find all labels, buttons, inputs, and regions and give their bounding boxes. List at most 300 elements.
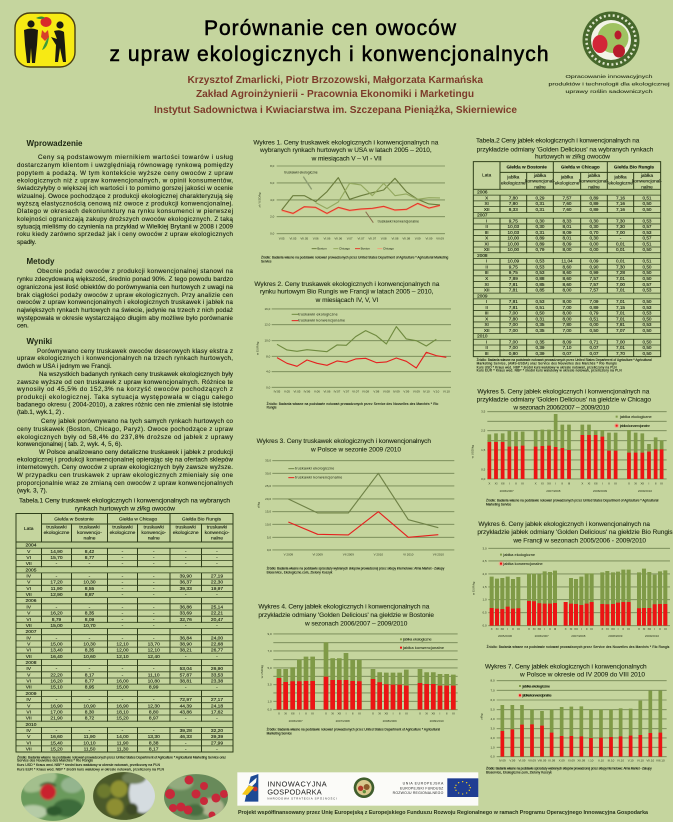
table 1 data rows: 8,17 — [149, 746, 159, 752]
table 2 data rows: 7,57 — [589, 282, 599, 287]
chart 6 plot: 1,5 — [483, 585, 487, 589]
table 2 data rows: XI — [484, 322, 489, 327]
table 1 data rows: 11,50 — [84, 746, 96, 752]
chart 1 title: wybranych rynkach hurtowych w USA w latach 2005 – 2010, — [259, 147, 432, 154]
chart 4 plot: 9,0 — [268, 632, 272, 636]
table 2 title — [476, 138, 654, 160]
table 1 source note — [17, 754, 226, 772]
chart 3 plot: 0,0 — [267, 548, 271, 552]
table 2 data rows: 8,00 — [562, 299, 572, 304]
table 2 data rows: 10,00 — [508, 247, 520, 252]
logo: yellow Adam and Eve emblem — [15, 13, 75, 67]
text block: results: W Polsce analizowano ceny detaliczne truskawek i jabłek z produkcji — [39, 449, 233, 456]
chart 6 plot: XI — [606, 627, 609, 631]
chart 6 plot: 3,0 — [483, 546, 487, 550]
chart 3 legend: truskawki konwencjonalne — [295, 476, 342, 480]
chart 5 plot — [470, 410, 667, 493]
chart 5 plot: III — [521, 481, 524, 485]
table 2 data rows: 0,50 — [642, 247, 652, 252]
chart 5 title: przykładzie odmiany 'Golden Delicious' na giełdzie w Chicago — [477, 396, 651, 403]
chart 2 title: Wykres 2. Ceny truskawek ekologicznych i konwencjonalnych na — [254, 281, 440, 288]
table 1 title: rynkach hurtowych w zł/kg owoców — [75, 506, 175, 512]
chart 6 plot: w EUR/kg — [472, 581, 476, 595]
chart 7 title: w Polsce w okresie od IV 2009 do VIII 2010 — [519, 671, 645, 678]
chart 1 source: Service — [261, 260, 272, 264]
table 1 data rows: - — [153, 587, 155, 592]
table 2 data rows: 0,80 — [509, 351, 518, 356]
chart 7 plot: 5,0 — [491, 708, 495, 712]
chart 4 plot: I — [299, 712, 300, 716]
table 1 data rows: V — [27, 642, 31, 648]
table 2 data rows: 7,01 — [616, 311, 625, 316]
panel: introduction text — [16, 139, 234, 246]
chart 3 source: Źródło: Badania własne na podstawie sprzedaży wybranych sklepów prowadzonej przez sklepy internetowe: Alma Market - Zakupy — [267, 566, 445, 571]
table 1 data rows: VI — [26, 586, 31, 592]
table 2 data rows: 7,30 — [616, 224, 625, 229]
table 2 data rows: 7,60 — [562, 207, 572, 212]
chart 6 source: Źródło: Badania własne na podstawie notowań prowadzonych przez Service des Nouvelles des Marchés * Rio Rungis — [487, 644, 670, 649]
chart 5 plot: II — [655, 481, 657, 485]
table 1 data rows: - — [153, 556, 155, 561]
table 2 source note — [477, 357, 652, 373]
chart 1 plot: V.07 — [347, 237, 353, 241]
table 2 header: jabłka — [587, 173, 600, 178]
table 2 source note: Kurs USD * Kraus wed. NBP * średni kurs walutowy w okresie notowań, przeliczony na PLN — [477, 365, 617, 369]
table 1 data rows: 11,90 — [117, 740, 129, 746]
table 1 data rows: 10,10 — [83, 740, 96, 746]
table 2 data rows: 0,29 — [535, 195, 545, 200]
chart 2 source — [267, 401, 439, 410]
chart 6 plot: I — [507, 627, 508, 631]
chart 5 plot: II — [608, 481, 610, 485]
chart 6 plot: 0,5 — [483, 611, 487, 615]
chart 7 plot: V.10 — [628, 759, 634, 763]
table 1 data rows: VII — [26, 685, 32, 691]
chart 2 title — [254, 281, 440, 304]
table 1 data rows: - — [122, 605, 124, 610]
table 1 data rows: 22,20 — [50, 672, 63, 678]
table 2 data rows: 0,53 — [642, 311, 652, 316]
text block: results: zawsze wyższe od cen truskawek z upraw konwencjonalnych. Różnice te — [17, 379, 234, 386]
table 1 header: truskawki — [176, 524, 196, 530]
table 2 data rows: I — [486, 299, 487, 304]
chart 5 plot: XII — [594, 481, 598, 485]
table 2 data rows: 0,89 — [589, 207, 599, 212]
text block: results: Na wszystkich badanych rynkach ceny truskawek ekologicznych były — [39, 371, 234, 378]
chart 1 plot: 0,0 — [270, 232, 275, 236]
table 2 header: ekologiczne — [555, 181, 580, 186]
table 2 data rows: II — [485, 224, 488, 229]
chart 6 plot: III — [517, 627, 520, 631]
table 2 data rows: 0,50 — [535, 311, 545, 316]
chart 4 plot: XII — [384, 712, 388, 716]
chart 2 plot: V.10 — [433, 390, 440, 394]
table 1 data rows: 39,39 — [211, 734, 223, 740]
table 1 data rows: 17,62 — [211, 710, 223, 716]
table 2 data rows: 7,09 — [589, 299, 599, 304]
table 1 data rows: 15,70 — [50, 555, 63, 561]
table 2 data rows: 8,09 — [562, 339, 572, 344]
table 2 data rows: 0,50 — [642, 270, 652, 275]
table 1 data rows: - — [122, 636, 124, 641]
table 2 data rows: 0,53 — [535, 264, 545, 269]
table 2 header: jabłka — [560, 174, 573, 179]
table 1 data rows: IV — [26, 728, 32, 734]
project description: Opracowanie innowacyjnych — [566, 74, 653, 80]
chart 6 title — [477, 521, 673, 544]
table 1 data rows: 38,81 — [180, 679, 192, 685]
project description: produktów i technologii dla ekologicznej — [548, 82, 670, 88]
chart 4 title: Wykres 4. Ceny jabłek ekologicznych i konwencjonalnych na — [258, 604, 430, 611]
table 2 data rows: III — [485, 351, 489, 356]
table 1 data rows: - — [89, 667, 91, 672]
chart 6 title: Wykres 6. Ceny jabłek ekologicznych i konwencjonalnych na — [478, 521, 650, 528]
table 2 data rows: 8,01 — [562, 236, 572, 241]
table 1 source note: Kurs USD * Kraus wed. NBP * średni kurs walutowy w okresie notowań, przeliczony na PLN — [17, 763, 160, 767]
chart 2 plot: VI.08 — [383, 390, 390, 394]
chart 5 plot: X — [581, 481, 583, 485]
chart 2 plot: VI.05 — [294, 390, 301, 394]
text block: methods: występowała w okresie wystarczająco długim aby możliwe było porównanie — [16, 315, 234, 322]
photo: cherries oval — [162, 773, 230, 821]
table 1 data rows: 10,70 — [83, 623, 96, 629]
chart 7 title — [485, 663, 647, 678]
chart 5 plot: XII — [547, 481, 551, 485]
table 2 data rows: 10,09 — [508, 259, 520, 264]
table 1 header: truskawki — [207, 524, 227, 530]
table 2 data rows: 0,50 — [642, 316, 652, 321]
text block: introduction — [16, 154, 234, 246]
text block: results: ceny truskawek (Boston, Chicago, Paryż). Owoce pochodzące z upraw — [17, 426, 234, 433]
table 2 data rows: 0,07 — [589, 351, 599, 356]
table 1 data rows: 15,40 — [50, 740, 63, 746]
table 2 header: Giełda w Bostonie — [506, 165, 547, 170]
table 1 source note: Źródło: Badania własne na podstawie notowań prowadzonych przez United States Department of Agriculture * Agricultural Marketing Service oraz — [17, 754, 226, 760]
table 1 source note: Kurs EUR * Kraus wed. NBP * średni kurs walutowy w okresie notowań, przeliczony na PLN — [17, 768, 164, 772]
text block: methods: Obecnie podaż owoców z produkcji konwencjonalnej stanowi na — [37, 268, 234, 275]
table 1 header: truskawki — [46, 524, 67, 530]
chart 2 plot: IV.09 — [393, 390, 400, 394]
chart 5 legend: jabłka ekologiczne — [619, 415, 652, 419]
table 1 data rows: - — [153, 593, 155, 598]
chart 3 plot: V 2010 — [374, 552, 383, 556]
chart 2 plot: IV.05 — [274, 390, 281, 394]
table 2 data rows: 0,35 — [535, 339, 545, 344]
table 1 data rows: - — [56, 562, 58, 567]
table 2 data rows: 0,31 — [535, 207, 545, 212]
table 2 data rows: 0,50 — [589, 328, 599, 333]
table 1 data rows: 26,90 — [211, 666, 223, 672]
text block: methods: rynku zdecydowaną większość, średnio ponad 90%. Z tego powodu bardzo — [17, 276, 234, 283]
table 2 data rows: 8,00 — [562, 316, 572, 321]
panel: chart 4 apples Boston — [258, 604, 458, 736]
chart 4 plot: II — [352, 712, 354, 716]
chart 1 plot: VI.09 — [425, 237, 433, 241]
table 1 data rows: - — [153, 636, 155, 641]
chart 6 plot: III — [590, 627, 593, 631]
table 2 data rows: 0,07 — [562, 351, 572, 356]
chart 3 plot: 20,0 — [265, 497, 271, 501]
table 1 data rows: - — [185, 748, 187, 752]
chart 4 plot: w USD/kg — [260, 665, 264, 678]
table 2 header: jabłka — [613, 174, 627, 179]
text block: results: upraw ekologicznych i konwencjonalnych na trzech rynkach hurtowych, — [17, 355, 233, 362]
chart 4 plot: III — [358, 712, 361, 716]
table 1 data rows: 24,18 — [211, 703, 223, 709]
authors and affiliation: Instytut Sadownictwa i Kwiaciarstwa im. Szczepana Pieniążka, Skierniewice — [154, 105, 517, 116]
table 1 data rows: - — [122, 624, 124, 629]
chart 7 plot: 3,0 — [491, 727, 495, 731]
table 1 data rows: 16,60 — [50, 734, 63, 740]
chart 3 legend — [288, 467, 342, 480]
table 1 data rows: 16,00 — [116, 679, 129, 685]
chart 6 plot: 0,0 — [483, 624, 487, 628]
table 1 title — [19, 498, 230, 512]
table 1 data rows: 27,19 — [211, 574, 223, 580]
table 2 data rows: 0,00 — [589, 322, 599, 327]
table 2 data rows: 7,00 — [509, 311, 518, 316]
chart 5 plot: III — [568, 481, 570, 485]
chart 4 plot: II — [446, 712, 448, 716]
table 1 data rows: IV — [26, 604, 32, 610]
chart 4 plot: X — [325, 712, 327, 716]
chart 1 plot: VII.09 — [436, 237, 444, 241]
table 1 data rows: - — [122, 698, 124, 703]
table 2 data rows: 7,80 — [509, 316, 518, 321]
chart 4 plot: XII — [291, 712, 295, 716]
text block: introduction: Dlatego w okresach dekoniunktury na rynku konsumenci w pierwszej — [17, 208, 233, 215]
table 1 data rows: - — [185, 624, 187, 629]
table 1 data rows: 26,77 — [211, 648, 223, 654]
table 1 data rows: - — [89, 636, 91, 641]
table 2 data rows: II — [485, 264, 488, 269]
chart 1 plot: VII.06 — [334, 237, 343, 241]
panel: methods text — [16, 257, 234, 330]
chart 6 plot: XII — [611, 627, 615, 631]
table 1 header: Giełda w Chicago — [119, 516, 157, 522]
chart 6 plot: XII — [574, 627, 578, 631]
table 1 data rows: 8,99 — [149, 685, 159, 691]
chart 2 plot: VI.09 — [413, 390, 420, 394]
table 1 data rows: 16,20 — [50, 611, 63, 617]
chart 6 title: we Francji w sezonach 2005/2006 - 2009/2010 — [512, 537, 646, 544]
chart 1 legend — [312, 247, 394, 251]
table 2 data rows: 0,89 — [535, 236, 545, 241]
table 1 data rows: 14,90 — [50, 549, 63, 555]
table 2 data rows: XII — [484, 288, 490, 293]
table 2 data rows: 7,00 — [509, 322, 518, 327]
chart 1 plot: V.08 — [381, 237, 387, 241]
table 2 data rows: 0,30 — [589, 224, 599, 229]
chart 6 plot: 2,5 — [483, 559, 487, 563]
chart 1 legend: Chicago — [339, 247, 350, 251]
table 2 data rows: 0,71 — [589, 339, 599, 344]
title: Porównanie cen owoców — [204, 17, 457, 40]
chart 4 plot: 3,0 — [268, 683, 272, 687]
chart 3 title — [257, 438, 431, 453]
text block: introduction: dostarczanym klientom i uwzględniają równowagę rynkową pomiędzy — [17, 162, 234, 169]
table 1 data rows: VI — [26, 555, 31, 561]
table 2 data rows: 0,53 — [642, 288, 652, 293]
table 2 data rows: 0,88 — [535, 276, 545, 281]
table 1 data rows: - — [185, 556, 187, 561]
table 2 data rows: 7,57 — [589, 288, 599, 293]
chart 2 source: Rungis — [267, 406, 277, 410]
table 2 data rows: 7,01 — [616, 316, 625, 321]
table 2 data rows: 0,79 — [535, 247, 545, 252]
chart 6 plot: 2006/2007 — [535, 634, 549, 638]
table 1 data rows: 16,90 — [50, 703, 63, 709]
table 2 header: konwencjonal- — [632, 179, 662, 184]
table 2 data rows: 7,81 — [509, 305, 518, 310]
table 2 data rows: 0,53 — [535, 259, 545, 264]
authors and affiliation — [154, 75, 517, 116]
chart 6 plot: 2,0 — [483, 572, 487, 576]
chart 1 source: Źródło: Badania własne na podstawie notowań prowadzonych przez United States Department of Agriculture * Agricultural Marketing — [261, 255, 449, 260]
chart 4 plot: I — [393, 712, 394, 716]
table 2 data rows: III — [485, 230, 489, 235]
text block: methods: cen. — [17, 322, 29, 330]
chart 4 legend: jabłka konwencjonalne — [402, 646, 444, 650]
chart 5 plot: 2009/2010 — [638, 489, 652, 493]
panel: results text — [16, 337, 234, 494]
chart 5 plot: 3,5 — [481, 410, 486, 414]
chart 7 legend: jabłka ekologiczne — [521, 684, 550, 688]
table 2 data rows: 0,89 — [589, 195, 599, 200]
text block: introduction: popytem a podażą. W tym kontekście wyższe ceny owoców z upraw — [17, 170, 234, 177]
table 1 data rows: V — [27, 703, 31, 709]
chart 7 plot: VIII.09 — [538, 759, 547, 763]
chart 4 plot: 2007/2008 — [336, 719, 350, 723]
chart 7 plot: IV.09 — [499, 759, 506, 763]
chart 6 plot: 2005/2006 — [498, 634, 512, 638]
chart 1 source — [261, 255, 449, 264]
chart 4 plot — [260, 632, 458, 723]
chart 1 plot: VII.05 — [300, 237, 309, 241]
table 2 data rows: 9,75 — [509, 270, 518, 275]
table 2 data rows: 2007 — [477, 213, 488, 218]
table 2 data rows: 8,01 — [562, 224, 572, 229]
chart 6 legend: jabłka ekologiczne — [502, 553, 535, 557]
table 1 data rows: - — [153, 667, 155, 672]
table 2 data rows: 0,50 — [642, 264, 652, 269]
text block: introduction: sytuacją mieliśmy do czynienia na przykład w Wielkiej Brytanii w 2008 i 2009 — [17, 224, 234, 230]
table 1 data rows: 2008 — [26, 660, 37, 666]
chart 4 plot: 2008/2009 — [383, 719, 397, 723]
table 1 data rows: - — [153, 618, 155, 623]
chart 3 title: Wykres 3. Ceny truskawek ekologicznych i konwencjonalnych — [257, 438, 431, 445]
table 1 data rows: - — [56, 729, 58, 734]
chart 2 plot: IV.06 — [304, 390, 311, 394]
chart 7 plot: zł/kg — [480, 713, 484, 720]
table 2 data rows: 0,57 — [642, 236, 652, 241]
table 2 source note: Kurs EUR * Kraus wed. NBP * średni kurs walutowy w okresie notowań, przeliczony na PLN — [477, 369, 622, 373]
text block: results: (wyk. 3, 7). — [17, 488, 48, 494]
table 1 data rows: - — [153, 550, 155, 555]
table 2 data rows: 7,01 — [616, 288, 625, 293]
chart 2 plot: VI.06 — [324, 390, 331, 394]
table 1 data rows: 13,30 — [148, 734, 160, 740]
table 1 data rows: 13,40 — [50, 648, 63, 654]
table 2 data rows: 0,50 — [642, 328, 652, 333]
table 2 data rows: 2009 — [477, 293, 488, 298]
chart 5 plot: 2,5 — [481, 429, 486, 433]
table 1 data rows: 8,42 — [85, 549, 95, 555]
chart 2 plot: IV.10 — [423, 390, 430, 394]
table 1 data rows: 15,00 — [116, 685, 129, 691]
chart 7 plot: XI.09 — [568, 759, 575, 763]
table 1 data rows: 16,20 — [50, 679, 63, 685]
table 1 data rows: 10,30 — [83, 580, 96, 586]
table 1 data rows: 53,04 — [180, 666, 192, 672]
chart 4 title — [258, 604, 434, 627]
table 2 data rows: 10,00 — [508, 241, 520, 246]
table 1 data rows: 22,68 — [211, 642, 223, 648]
chart 1 plot: VI.05 — [290, 237, 297, 241]
table 2 data rows: 7,00 — [562, 305, 572, 310]
chart 5 plot: I — [649, 481, 650, 485]
chart 6 legend: jabłka konwencjonalne — [502, 562, 543, 566]
chart 2 plot: VI.10 — [443, 390, 450, 394]
table 1 data rows: 38,90 — [180, 642, 192, 648]
table 2 data rows: 8,60 — [562, 270, 572, 275]
chart 6 plot: I — [654, 627, 655, 631]
chart 6 plot: X — [638, 627, 640, 631]
table 2 data rows: 0,30 — [589, 218, 599, 223]
chart 1 plot: 8,0 — [270, 164, 275, 168]
table 1 data rows: - — [216, 655, 218, 660]
table 1 data rows: 24,00 — [211, 635, 223, 641]
chart 1 title — [253, 140, 439, 162]
table 2 data rows: 9,75 — [509, 218, 518, 223]
table 2 data rows: 0,89 — [589, 305, 599, 310]
chart 6 plot: II — [549, 627, 551, 631]
chart 1 plot: VII.07 — [368, 237, 377, 241]
chart 6 plot: II — [512, 627, 514, 631]
table 1 data rows: - — [153, 574, 155, 580]
table 2 data rows: 0,53 — [642, 230, 652, 235]
table 2 data rows: 8,33 — [562, 218, 572, 223]
table 1 header: ekologiczne — [44, 530, 70, 536]
table 2 data rows: X — [485, 276, 489, 281]
table 1 data rows: - — [153, 562, 155, 567]
chart 4 plot: II — [399, 712, 401, 716]
chart 4 plot: 1,0 — [268, 699, 272, 703]
table 1 data rows: 18,10 — [116, 710, 129, 716]
table 1 data rows: 15,20 — [116, 716, 129, 722]
chart 7 legend — [518, 684, 552, 698]
Innowacyjna Gospodarka wordmark: NARODOWA STRATEGIA SPÓJNOŚCI — [267, 795, 337, 800]
chart 7 plot: VII.10 — [646, 759, 655, 763]
table 1 data rows: 8,17 — [85, 672, 95, 678]
chart 4 plot: 2009/2010 — [430, 719, 444, 723]
table 2 data rows: 0,01 — [616, 247, 625, 252]
chart 1 plot: V.05 — [279, 237, 285, 241]
table 1 data rows: 32,76 — [180, 617, 192, 623]
table 1 data rows: V — [27, 580, 31, 586]
table 1 data rows: 20,47 — [211, 617, 223, 623]
text block: introduction: spadły. — [17, 239, 36, 246]
chart 3 plot: 35,0 — [265, 459, 271, 463]
chart 5 plot: 2008/2009 — [593, 489, 607, 493]
EU text — [393, 781, 444, 795]
table 2 title: Tabela.2 Ceny jabłek ekologicznych i konwencjonalnych na — [476, 138, 640, 145]
table 1 data rows: 8,77 — [85, 679, 95, 685]
table 2 data rows: 2008 — [477, 253, 488, 258]
chart 2 plot: 16,0 — [265, 307, 271, 311]
table 1 header: ekologiczne — [173, 530, 199, 536]
table 1 data rows: 15,00 — [50, 642, 63, 648]
